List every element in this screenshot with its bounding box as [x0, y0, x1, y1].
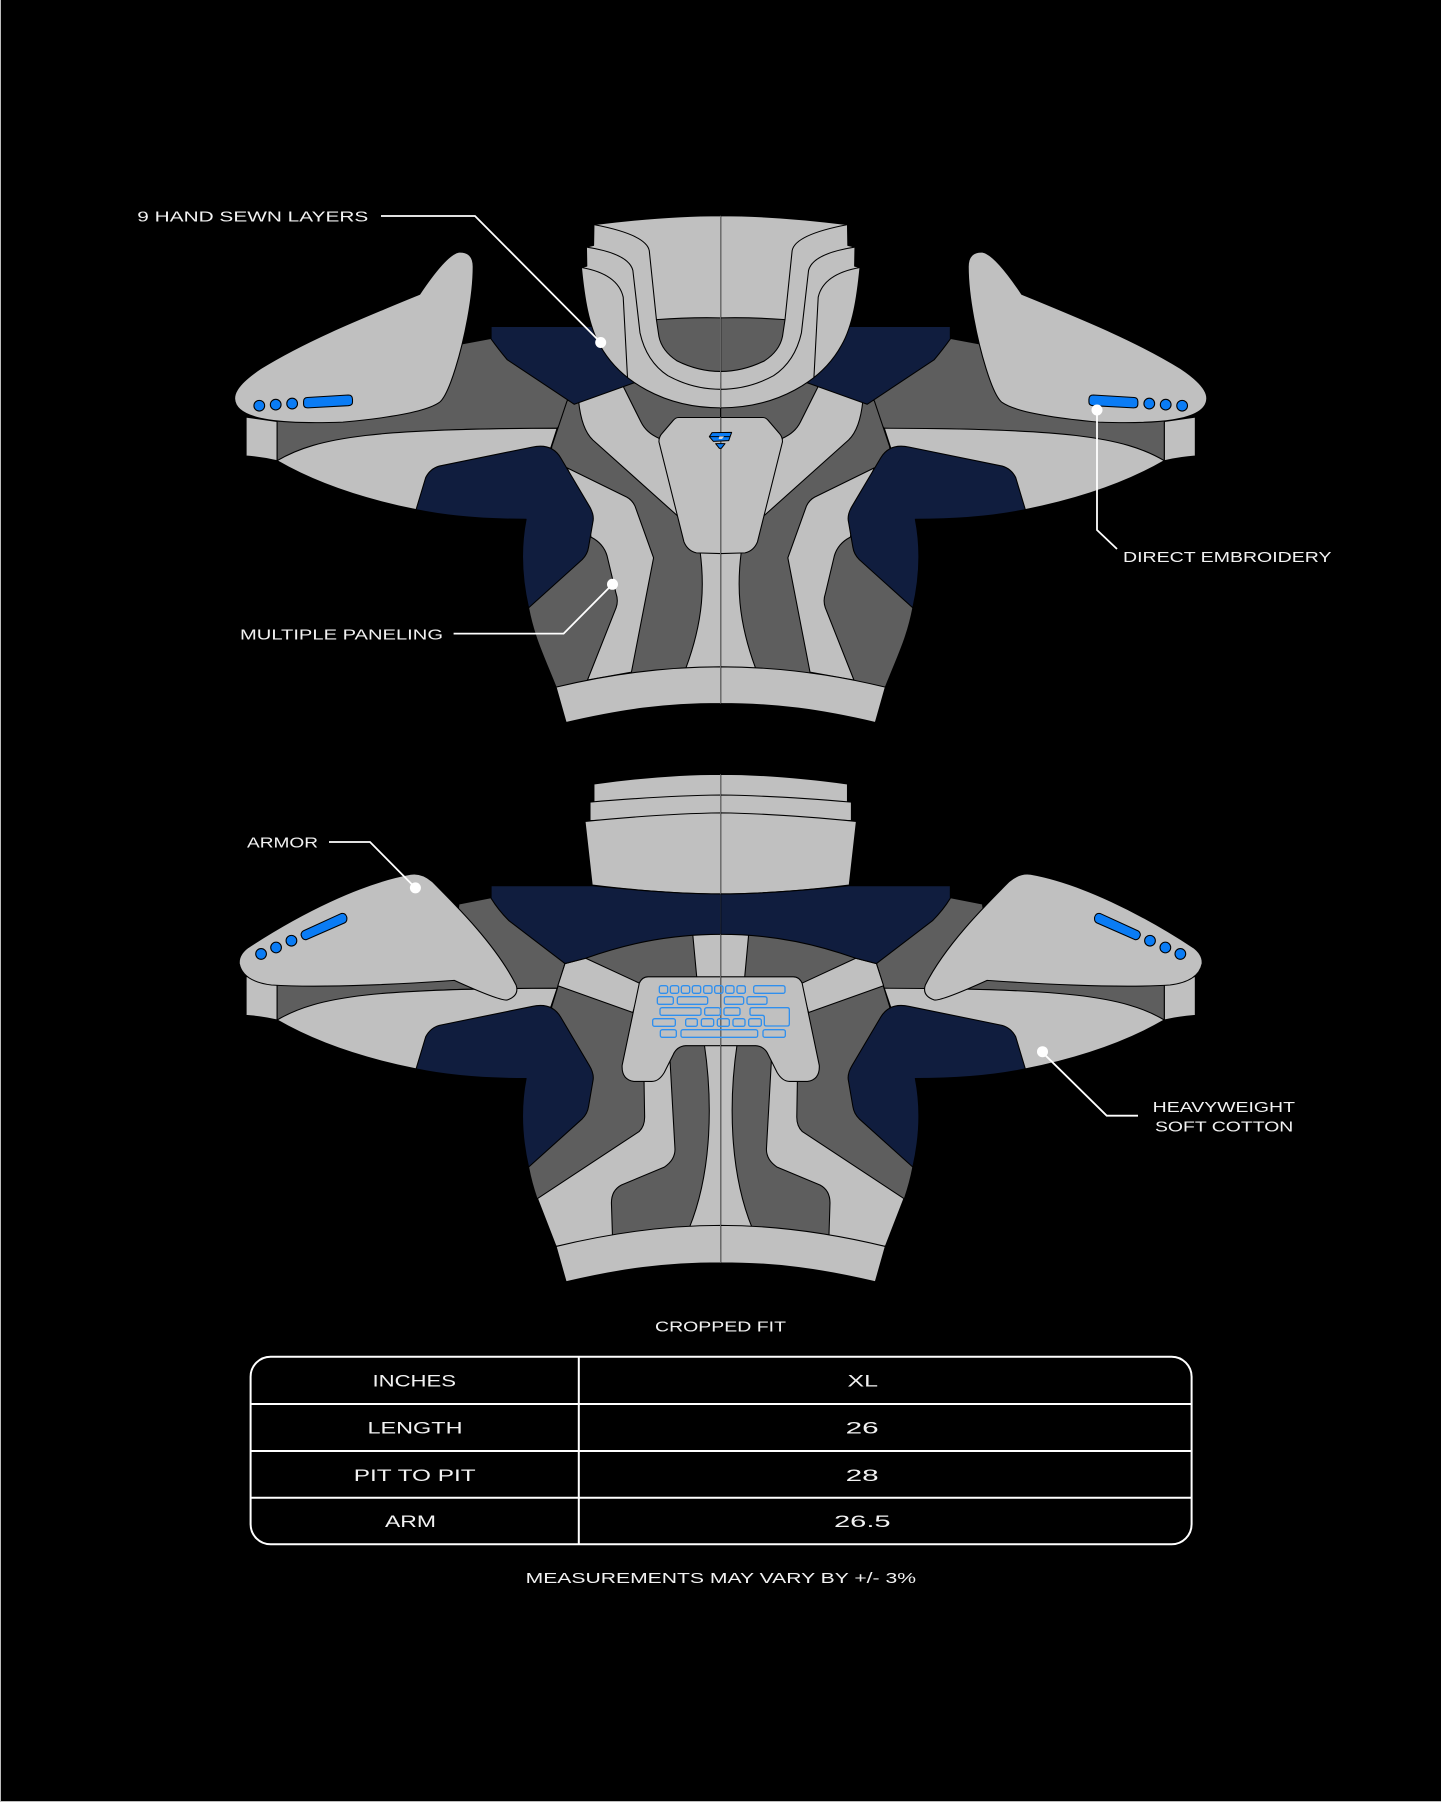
- front centre seam: [720, 216, 722, 704]
- callout: direct embroidery: DIRECT EMBROIDERY: [1123, 550, 1332, 566]
- upper sleeve dark panel: [277, 897, 565, 1020]
- back centre seam: [720, 774, 722, 1263]
- callout: multiple paneling: [240, 579, 618, 643]
- callout: armor: [247, 836, 421, 893]
- hem band: [556, 667, 721, 722]
- embroidery dots and bar: [256, 913, 347, 959]
- back neck middle layer: [590, 795, 721, 821]
- upper sleeve dark panel: [277, 338, 574, 461]
- collar layers: [581, 216, 721, 408]
- keyboard embroidery: [653, 986, 789, 1037]
- size table: XL: [848, 1372, 878, 1391]
- shoulder blade strap: [558, 958, 641, 1012]
- shoulder armor: [235, 252, 473, 423]
- collar opening: [656, 318, 721, 371]
- lower centre strip: [689, 1044, 721, 1228]
- callout: heavyweight soft cotton: HEAVYWEIGHT: [1153, 1100, 1295, 1116]
- callout: multiple paneling: MULTIPLE PANELING: [240, 627, 443, 643]
- chest strap: [579, 386, 679, 517]
- front view of jacket: [235, 216, 1207, 722]
- sleeve cuff: [246, 976, 277, 1020]
- footnote: MEASUREMENTS MAY VARY BY +/- 3%: [526, 1571, 916, 1587]
- size table: 26: [846, 1418, 879, 1437]
- side panel: [567, 468, 654, 680]
- size table: PIT TO PIT: [354, 1466, 476, 1485]
- callout: armor: ARMOR: [247, 836, 318, 852]
- centre strip: [686, 551, 721, 669]
- lower sleeve light panel: [277, 428, 557, 510]
- shoulder armor: [239, 874, 517, 1000]
- size table: 28: [846, 1466, 879, 1485]
- navy yoke: [491, 326, 634, 404]
- front right half: [721, 216, 1207, 722]
- hem band: [556, 1225, 721, 1282]
- back left half: [239, 774, 721, 1282]
- callout: heavyweight soft cotton: [1037, 1046, 1295, 1135]
- back neck top layer: [594, 774, 721, 803]
- size table: INCHES: [372, 1372, 456, 1391]
- torso dark base: [529, 924, 721, 1249]
- back view of jacket: [239, 774, 1202, 1282]
- callout: heavyweight soft cotton: SOFT COTTON: [1155, 1119, 1293, 1135]
- size table: 26.5: [834, 1512, 891, 1531]
- navy back yoke: [491, 886, 721, 964]
- heading: cropped fit: CROPPED FIT: [655, 1320, 786, 1336]
- collar seam lines: [581, 225, 721, 389]
- callout: direct embroidery: [1092, 404, 1332, 566]
- back right half: [721, 774, 1202, 1282]
- size table: LENGTH: [368, 1418, 462, 1437]
- size table: ARM: [385, 1512, 436, 1531]
- chest plate: [659, 417, 721, 554]
- navy underarm panel: [416, 446, 593, 608]
- lower sleeve light panel: [277, 988, 557, 1069]
- torso dark base: [529, 383, 721, 690]
- navy underarm panel: [416, 1005, 593, 1167]
- sleeve cuff: [246, 417, 277, 461]
- embroidery dots and bar: [254, 395, 352, 411]
- chest logo: [709, 432, 732, 448]
- callout: 9 hand sewn layers: [137, 210, 606, 348]
- back neck lower layer: [585, 813, 721, 894]
- upper centre strip: [692, 928, 721, 981]
- size table: [251, 1357, 1192, 1544]
- lower side panel: [537, 1060, 675, 1246]
- keyboard plate: [622, 977, 721, 1081]
- front left half: [235, 216, 721, 722]
- callout: 9 hand sewn layers: 9 HAND SEWN LAYERS: [137, 210, 368, 226]
